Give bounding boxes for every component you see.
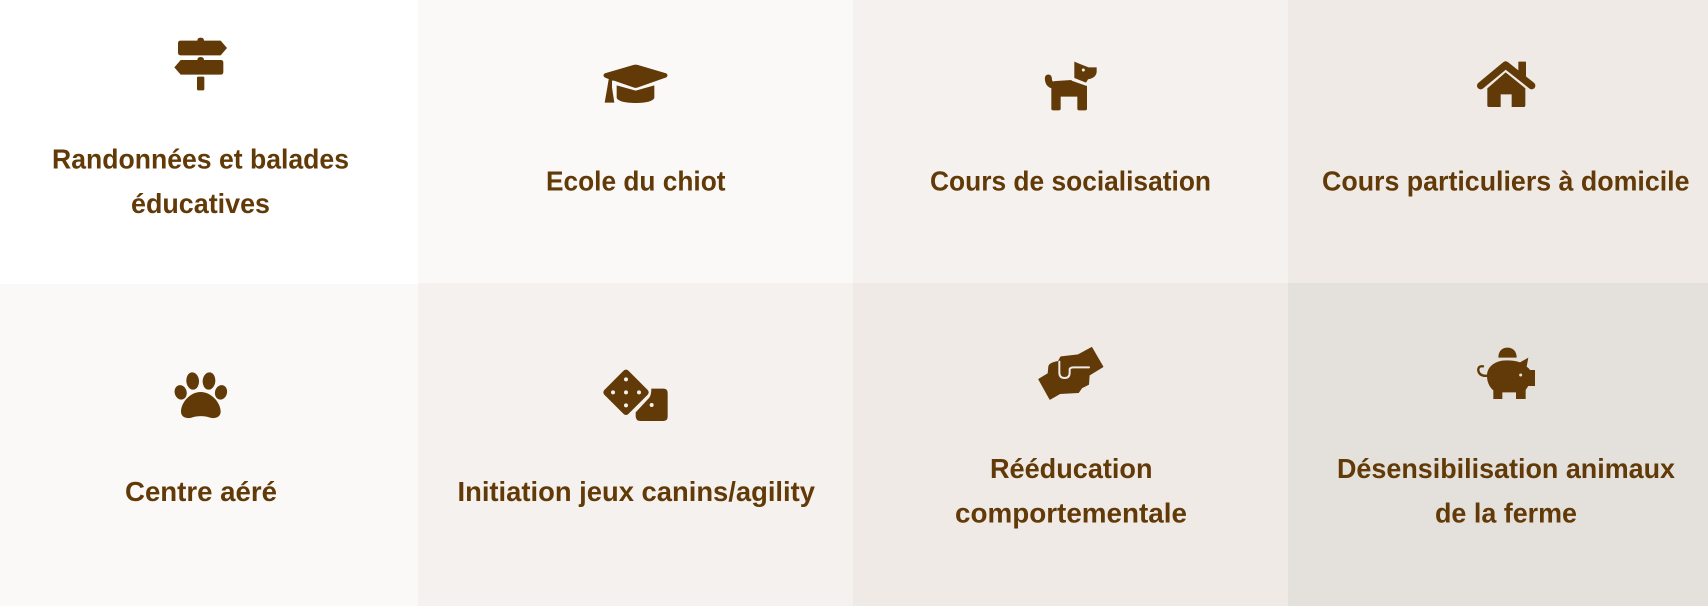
icon: graduation cap	[603, 65, 667, 103]
panel: Désensibilisation animaux de la ferme	[1288, 283, 1708, 606]
panel: Ecole du chiot	[418, 0, 853, 284]
panel: Centre aéré	[0, 284, 418, 606]
text: Randonnées et balades éducatives	[52, 144, 349, 219]
icon: piggy bank	[1478, 348, 1535, 399]
text: Désensibilisation animaux de la ferme: Désensibilisation animaux	[1337, 453, 1676, 484]
icon: house	[1481, 62, 1532, 107]
text: Randonnées et balades éducatives: éducatives	[131, 188, 270, 219]
panel: Randonnées et balades éducatives	[0, 0, 418, 284]
icon: dice	[607, 373, 668, 421]
text: Cours de socialisation: Cours de socialisation	[930, 166, 1211, 196]
icon: handshake	[1039, 348, 1103, 399]
text: Rééducation comportementale: comportementale	[955, 498, 1187, 528]
text: Rééducation comportementale: Rééducation	[990, 453, 1152, 484]
text: Randonnées et balades éducatives: Randonnées et balades	[52, 144, 349, 174]
panel: Cours particuliers à domicile	[1288, 0, 1708, 284]
text: Ecole du chiot: Ecole du chiot	[546, 166, 726, 196]
text: Initiation jeux canins/agility: Initiation jeux canins/agility	[458, 476, 816, 507]
panel: Initiation jeux canins/agility	[418, 283, 853, 606]
panel: Rééducation comportementale	[853, 283, 1288, 606]
panel: Cours de socialisation	[853, 0, 1288, 284]
icon: paw print	[173, 372, 229, 418]
icon: dog	[1048, 62, 1097, 110]
text: Désensibilisation animaux de la ferme	[1337, 453, 1676, 528]
text: Centre aéré: Centre aéré	[125, 476, 277, 507]
icon: signpost	[174, 38, 227, 90]
text: Désensibilisation animaux de la ferme: de la ferme	[1435, 498, 1577, 528]
text: Rééducation comportementale	[955, 453, 1187, 528]
text: Cours particuliers à domicile: Cours particuliers à domicile	[1322, 166, 1690, 196]
